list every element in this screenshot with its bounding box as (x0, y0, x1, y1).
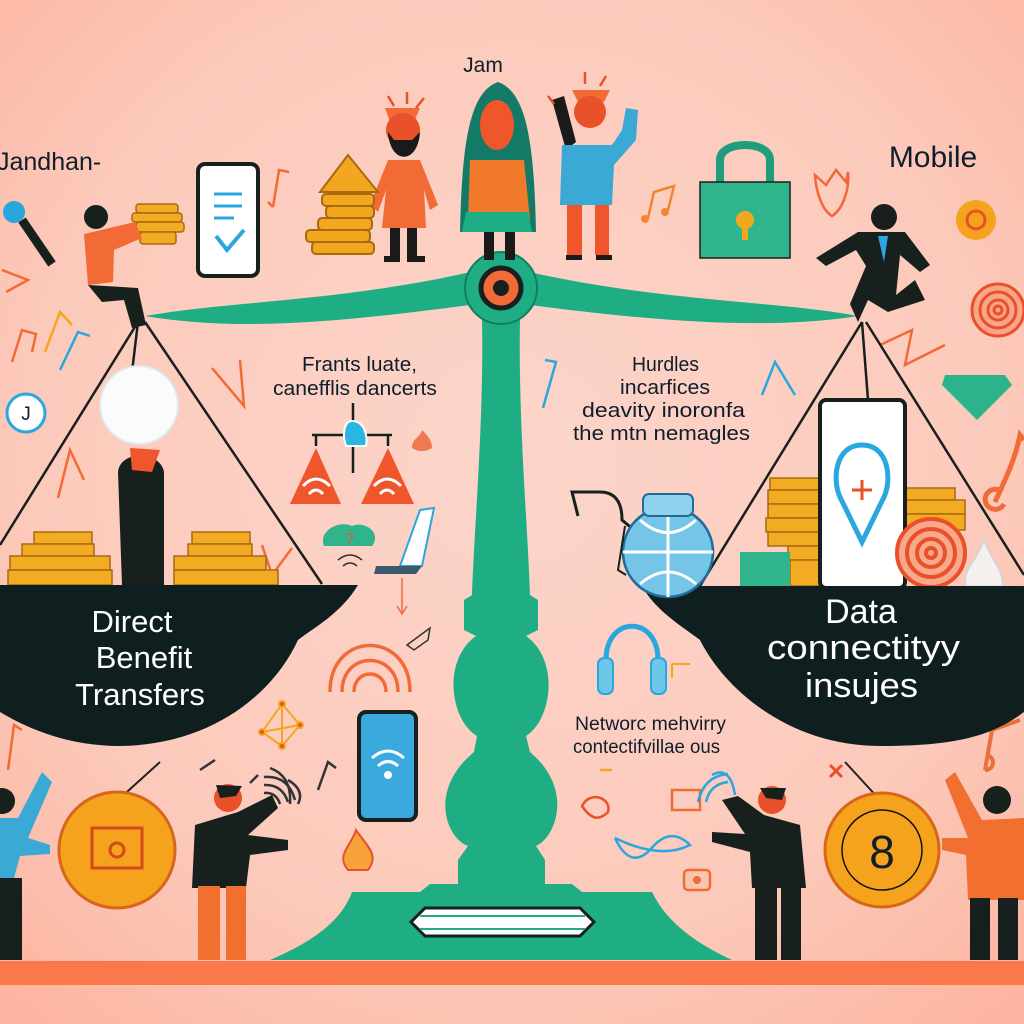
scale: central balance (145, 252, 858, 960)
icon: J badge (7, 394, 45, 432)
right pan label: insujes (805, 667, 918, 705)
left coins (8, 532, 278, 585)
scale base (270, 884, 732, 960)
icon: large coin right (825, 762, 939, 907)
icon: headphones (598, 626, 666, 694)
right pan ropes (700, 322, 1024, 586)
icon: orange note right (985, 435, 1024, 509)
left hanging pan assembly (0, 322, 358, 746)
right pan label: Data (825, 593, 897, 631)
icon: wifi rainbow (330, 646, 410, 692)
scale beam (145, 270, 858, 324)
icon: molecule (259, 701, 303, 749)
lower-right caption (573, 714, 726, 758)
figure: man bowing right (712, 786, 806, 960)
scale column (445, 320, 557, 884)
icon: diamond right (942, 375, 1012, 420)
icon: padlock (700, 145, 790, 258)
small cross marks (830, 765, 842, 777)
figure: man in orange kurta (370, 108, 438, 262)
icon: J badge: J (21, 404, 31, 425)
wifi arcs lower left (264, 777, 295, 804)
right coins (766, 478, 965, 586)
figure: man in blue raising arms (552, 90, 638, 260)
scale pivot (465, 252, 537, 324)
icon: cloud with question: ? (345, 531, 354, 548)
icon: gold coin pile centre left (306, 155, 378, 254)
figure: right edge man in orange (942, 772, 1024, 960)
left pan bowl (0, 585, 358, 746)
right spiral coin (897, 519, 965, 587)
decorative marks left and right (2, 270, 945, 770)
icon: spiral target right (972, 284, 1024, 336)
radiating marks above figures (388, 72, 606, 108)
figure: man running top right (816, 204, 930, 322)
label: Jandhan: Jandhan- (0, 148, 101, 176)
icon: orange note lower right (985, 720, 1020, 770)
floor band (0, 961, 1024, 985)
icon: large coin left (59, 762, 175, 908)
figure: left edge man with blue shirt (0, 772, 52, 960)
icon: glass teapot globe (572, 492, 713, 597)
centre-left caption (273, 354, 437, 400)
mini scale icon (290, 403, 414, 504)
figure: man lifting coins top left (84, 204, 184, 328)
icon: flower right (815, 170, 848, 216)
right white bulb (965, 540, 1002, 586)
centre-right caption: the mtn nemagles (573, 423, 750, 445)
arrow down (397, 578, 407, 614)
icon: cluster squiggles (582, 770, 735, 858)
icon: laptop (374, 508, 434, 574)
figure: man bowing left (192, 784, 288, 960)
label: Mobile: Mobile (889, 141, 977, 174)
icon: phone with check (198, 164, 258, 276)
left pan label: Direct (92, 604, 173, 639)
lower-right caption: Networc mehvirry (575, 714, 726, 735)
wifi arcs lower right (698, 774, 728, 802)
icon: webcam (684, 870, 710, 890)
right cash note (740, 552, 790, 586)
right phone with pin (820, 400, 905, 588)
centre-right caption: incarfices (620, 377, 710, 399)
centre-left caption: Frants luate, (302, 354, 417, 376)
centre-right caption: Hurdles (632, 354, 699, 376)
right pan label (767, 593, 960, 705)
label: Jam: Jam (463, 54, 503, 77)
icon: microphone (3, 201, 52, 264)
lower-right caption: contectifvillae ous (573, 737, 720, 758)
icon: cloud with question (323, 524, 375, 566)
icon: large coin right: 8 (869, 826, 895, 878)
figure: woman in sari (460, 82, 536, 260)
small marks lower left (200, 760, 336, 804)
icon: outline cube on stem (407, 628, 430, 650)
left pan label: Benefit (96, 640, 193, 675)
left pan label: Transfers (75, 677, 205, 712)
corner arrow mark (672, 664, 690, 678)
icons: music notes top (268, 170, 674, 223)
right hanging pan assembly (642, 322, 1024, 746)
left figure with white globe head (100, 366, 178, 585)
icon: medal top right (956, 200, 996, 240)
centre-right caption (573, 354, 750, 445)
centre-right caption: deavity inoronfa (582, 400, 746, 422)
left pan label (75, 604, 205, 712)
small orange cloud (412, 430, 432, 451)
right pan bowl (642, 586, 1024, 746)
left pan ropes (0, 322, 322, 584)
icon: flame (343, 830, 373, 870)
right pan label: connectityy (767, 629, 960, 667)
icon: smartphone wifi (359, 712, 416, 820)
centre-left caption: canefflis dancerts (273, 378, 437, 400)
